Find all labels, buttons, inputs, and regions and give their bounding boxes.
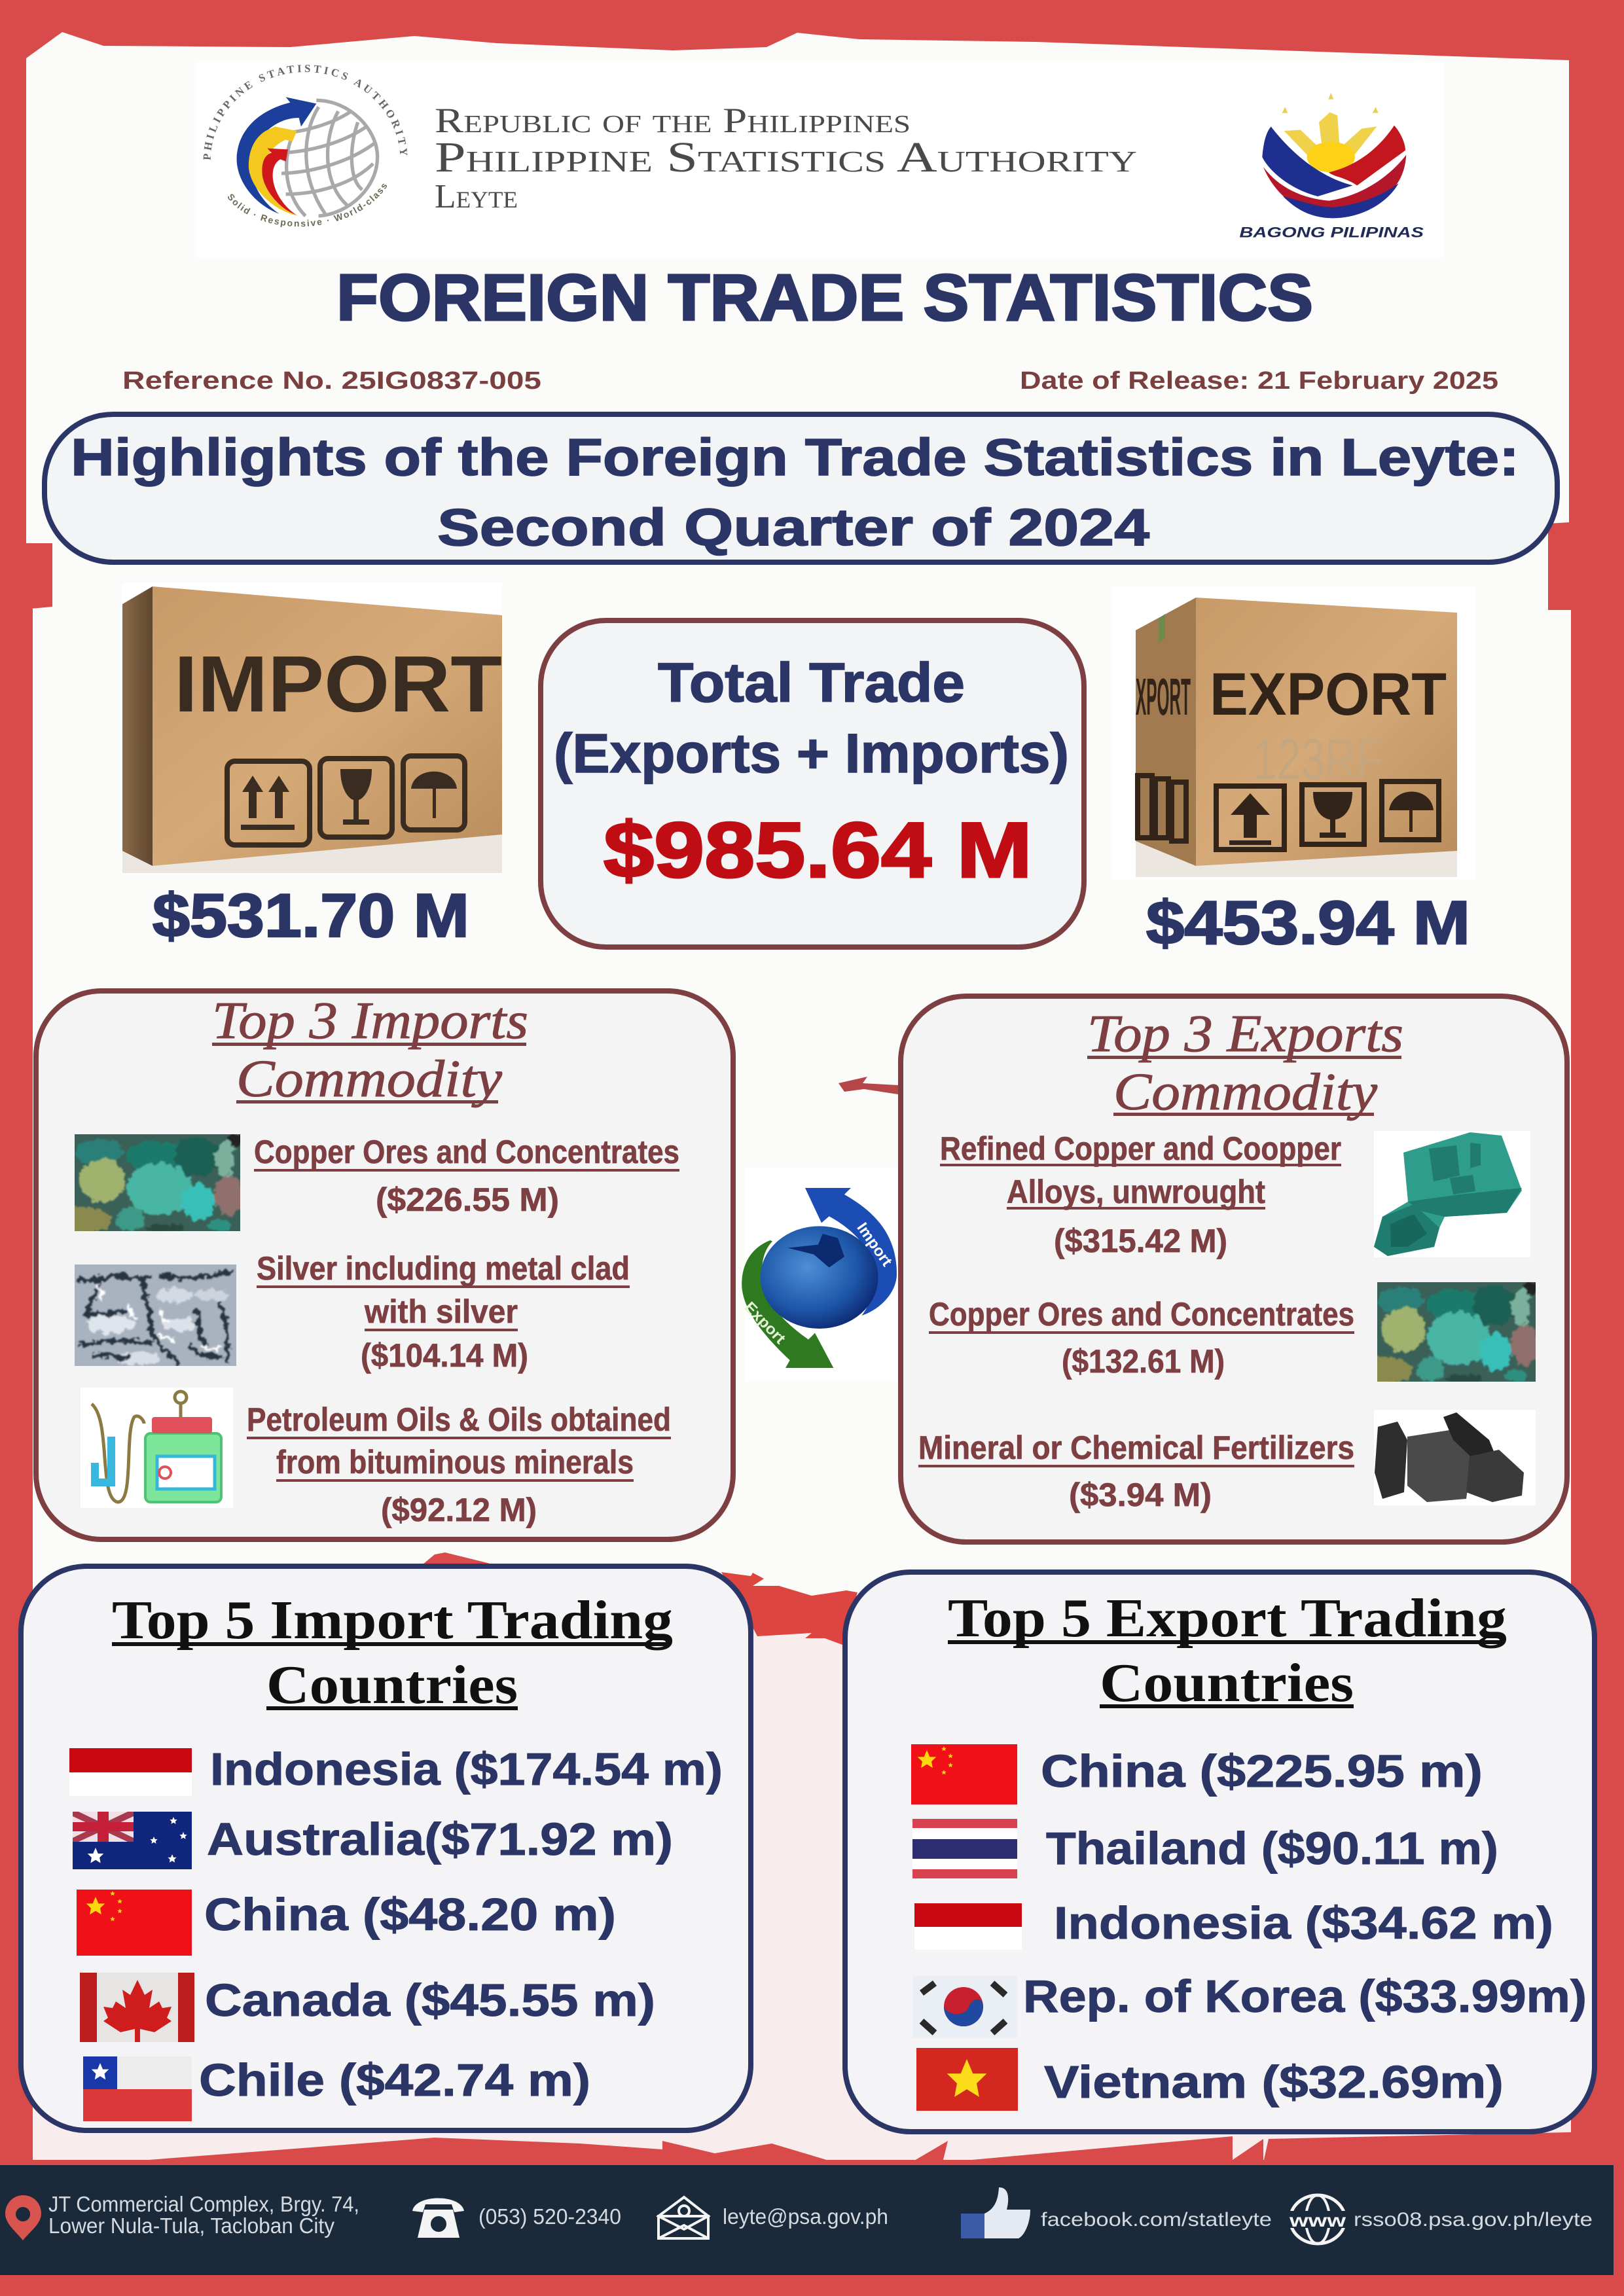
- text: petroleum: Petroleum Oils & Oils obtained: [247, 1401, 671, 1438]
- flag: Thailand: [912, 1819, 1017, 1878]
- icon: import box: [122, 583, 502, 874]
- image: copper ore: [75, 1134, 240, 1231]
- image: fertilizer coal: [1374, 1410, 1536, 1505]
- text: Indonesia: Indonesia ($174.54 m): [210, 1744, 723, 1795]
- heading: top 5 import: [112, 1590, 673, 1715]
- import value: $531.70 M: [153, 881, 469, 950]
- heading: top 3 imports: Top 3 Imports: [212, 992, 528, 1050]
- icon: export box: 123RF: [1253, 726, 1382, 791]
- flag: China: [911, 1744, 1017, 1804]
- flag: China: [77, 1890, 192, 1956]
- text: Thailand: Thailand ($90.11 m): [1046, 1823, 1498, 1874]
- icon: www globe: www: [1289, 2210, 1346, 2231]
- release date: Date of Release: 21 February 2025: [1020, 367, 1498, 395]
- title: FOREIGN TRADE STATISTICS: [336, 261, 1313, 334]
- website link: rsso08.psa.gov.ph/leyte: [1354, 2209, 1593, 2231]
- text: silver: Silver including metal clad: [257, 1250, 630, 1287]
- flag: Australia: [73, 1812, 192, 1869]
- panel: highlights heading: Highlights of the Foreign Trade Statistics in Leyte:: [71, 428, 1519, 486]
- icon: export box: XPORT: [1136, 668, 1191, 726]
- red streak above left lower panel: [419, 1552, 504, 1569]
- agency name text: [435, 101, 1137, 215]
- text: fertilizers: Mineral or Chemical Fertilizers: [918, 1429, 1354, 1466]
- text: petroleum: [247, 1401, 671, 1528]
- email: leyte@psa.gov.ph: [723, 2204, 888, 2229]
- panel: top 3 exports commodity: [901, 996, 1567, 1542]
- arrow: small red torn fragment: [839, 1077, 898, 1094]
- icon: import box: IMPORT: [174, 639, 502, 728]
- flag: Chile: [83, 2056, 192, 2121]
- image: copper ore: [1377, 1282, 1536, 1382]
- icon: import export globe: Import: [854, 1219, 896, 1269]
- icon: PSA seal logo: Solid · Responsive · World-class: [228, 183, 387, 228]
- torn pink lower paper: [33, 1597, 1571, 2160]
- icon: email envelope: [659, 2197, 708, 2238]
- red torn band between lower panels: [721, 1572, 857, 1645]
- text: copper ores: Copper Ores and Concentrates: [929, 1296, 1354, 1333]
- heading: top 3 imports: [212, 992, 528, 1108]
- text: Indonesia: Indonesia ($34.62 m): [1054, 1897, 1553, 1948]
- address: JT Commercial Complex, Brgy. 74,: [48, 2192, 359, 2216]
- torn white paper background: [26, 32, 1571, 1597]
- image: silver: [75, 1265, 236, 1366]
- agency name text: Republic of the Philippines: [435, 101, 911, 140]
- torn red bottom edge: [0, 2132, 1624, 2173]
- icon: import export globe: [741, 1168, 901, 1382]
- red right margin beside lower panels: [1571, 1551, 1624, 2179]
- flag: Indonesia: [69, 1748, 192, 1796]
- panel: total trade: Total Trade: [658, 652, 965, 713]
- flag: Vietnam: [916, 2048, 1018, 2111]
- icon: Bagong Pilipinas logo: BAGONG PILIPINAS: [1239, 224, 1424, 241]
- text: China: China ($225.95 m): [1041, 1746, 1483, 1797]
- text: fertilizers: [918, 1429, 1354, 1513]
- text: Rep. of Korea: Rep. of Korea ($33.99m): [1023, 1971, 1587, 2022]
- icon: facebook thumb: [961, 2187, 1030, 2238]
- icon: petroleum tank: [81, 1388, 233, 1508]
- panel: top 5 export trading countries: [845, 1572, 1595, 2132]
- text: copper ores: [254, 1134, 679, 1218]
- heading: top 5 export: Countries: [1100, 1653, 1354, 1713]
- text: copper ores: ($226.55 M): [376, 1181, 559, 1218]
- text: silver: ($104.14 M): [361, 1337, 528, 1374]
- image: refined copper: [1374, 1131, 1530, 1257]
- heading: top 3 exports: Commodity: [1113, 1064, 1378, 1121]
- text: copper ores: Copper Ores and Concentrates: [254, 1134, 679, 1170]
- panel: total trade: $985.64 M: [604, 806, 1032, 894]
- heading: top 5 import: Top 5 Import Trading: [112, 1590, 673, 1651]
- heading: top 5 export: Top 5 Export Trading: [948, 1588, 1507, 1649]
- text: Canada: Canada ($45.55 m): [205, 1975, 655, 2026]
- heading: top 5 import: Countries: [266, 1655, 518, 1715]
- icon: location pin: [5, 2195, 41, 2240]
- panel: highlights heading: Second Quarter of 2024: [437, 498, 1150, 556]
- heading: top 3 exports: Top 3 Exports: [1087, 1005, 1403, 1063]
- heading: top 5 export: [948, 1588, 1507, 1713]
- text: petroleum: ($92.12 M): [381, 1492, 537, 1528]
- icon: export box: EXPORT: [1210, 661, 1447, 728]
- panel: top 3 imports commodity: [36, 991, 733, 1539]
- icon: Bagong Pilipinas logo: [1239, 93, 1424, 241]
- export value: $453.94 M: [1146, 888, 1470, 957]
- heading: top 3 exports: [1087, 1005, 1403, 1121]
- icon: telephone: [412, 2198, 464, 2238]
- text: copper ores: [929, 1296, 1354, 1380]
- text: silver: with silver: [364, 1293, 518, 1330]
- address: [48, 2192, 359, 2238]
- text: China: China ($48.20 m): [204, 1889, 616, 1940]
- text: refined copper: Alloys, unwrought: [1007, 1174, 1265, 1210]
- panel: highlights heading: [45, 414, 1557, 562]
- panel: total trade: [541, 620, 1084, 947]
- flag: South Korea: [912, 1976, 1017, 2038]
- icon: www globe: [1288, 2195, 1347, 2244]
- agency name text: Leyte: [435, 178, 518, 215]
- icon: export box: [1113, 586, 1475, 880]
- text: Australia: Australia($71.92 m): [207, 1814, 673, 1865]
- panel: contact footer: [0, 2165, 1614, 2275]
- phone number: (053) 520-2340: [478, 2204, 621, 2229]
- flag: Indonesia: [914, 1903, 1022, 1950]
- icon: import export globe: Export: [741, 1299, 789, 1347]
- text: fertilizers: ($3.94 M): [1069, 1477, 1212, 1513]
- facebook link: facebook.com/statleyte: [1041, 2209, 1272, 2231]
- panel: top 5 import trading countries: [21, 1566, 751, 2130]
- heading: top 3 imports: Commodity: [236, 1050, 503, 1108]
- text: silver: [257, 1250, 630, 1374]
- text: Chile: Chile ($42.74 m): [199, 2054, 590, 2106]
- header: white logo banner: [203, 65, 1424, 241]
- text: refined copper: Refined Copper and Coopper: [940, 1130, 1341, 1167]
- text: refined copper: ($315.42 M): [1054, 1223, 1227, 1259]
- agency name text: Philippine Statistics Authority: [435, 134, 1137, 181]
- flag: Canada: [80, 1973, 194, 2042]
- text: refined copper: [940, 1130, 1341, 1259]
- address: Lower Nula-Tula, Tacloban City: [48, 2214, 334, 2238]
- icon: PSA seal logo: [203, 65, 407, 228]
- text: Vietnam: Vietnam ($32.69m): [1044, 2056, 1504, 2108]
- text: petroleum: from bituminous minerals: [276, 1444, 634, 1480]
- reference number: Reference No. 25IG0837-005: [122, 367, 541, 395]
- icon: PSA seal logo: PHILIPPINE STATISTICS AUTHORITY: [203, 65, 407, 160]
- panel: total trade: (Exports + Imports): [554, 723, 1069, 784]
- text: copper ores: ($132.61 M): [1062, 1343, 1225, 1380]
